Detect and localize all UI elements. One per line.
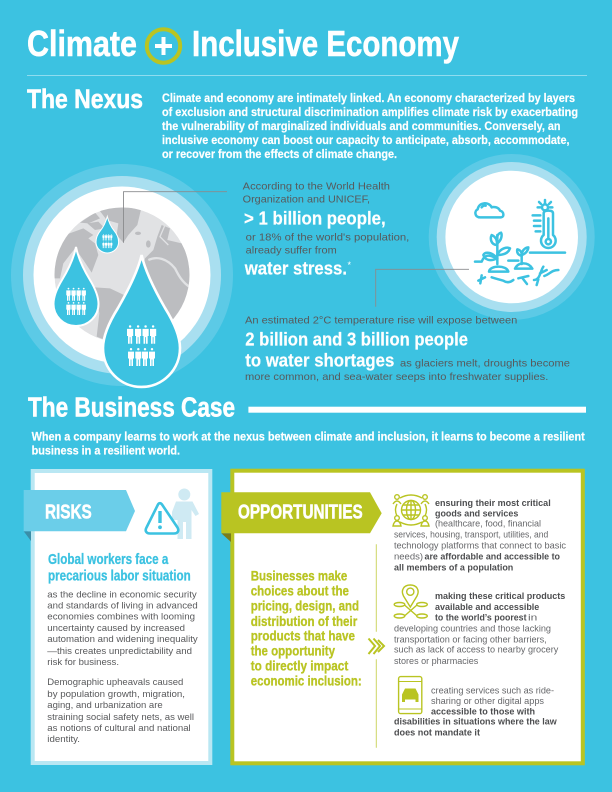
text: availability: such as lack of access to nearby grocery <box>394 644 559 655</box>
text: water shortages statistic: as glaciers melt, droughts become <box>400 358 570 370</box>
globe <box>52 207 193 342</box>
opportunities ribbon: OPPORTUNITIES <box>238 501 363 523</box>
text: water stress statistic <box>243 180 409 279</box>
text: affordability <box>394 497 566 573</box>
text: water shortages statistic: to water shortages <box>245 350 394 371</box>
risks text: automation and widening inequality <box>47 634 198 644</box>
text: water shortages statistic: An estimated 2°C temperature rise will expose between <box>245 314 517 326</box>
risks text: economies combines with looming <box>47 612 195 622</box>
leader line: globe to first statistic <box>124 192 227 243</box>
intro text block <box>162 91 578 161</box>
text: water stress statistic: According to the World Health <box>243 180 390 192</box>
intro text block: of exclusion and structural discrimination amplifies climate risk by exacerbating <box>162 105 578 119</box>
text: availability <box>394 590 565 666</box>
text: water stress statistic: Organization and UNICEF, <box>243 194 370 206</box>
title: Climate <box>27 23 137 64</box>
opportunities lead text: Businesses make <box>251 568 347 584</box>
risks text: as the decline in economic security <box>47 589 197 599</box>
icon: globe with people <box>393 495 429 526</box>
panel: opportunities <box>221 471 583 763</box>
text: digital access: creating services such as ride- <box>431 684 554 695</box>
leader line: climate icon to second statistic <box>376 269 469 307</box>
text: digital access: sharing or other digital apps <box>431 695 544 706</box>
text: water shortages statistic: 2 billion and 3 billion people <box>245 329 468 350</box>
text: availability: stores or pharmacies <box>394 655 479 666</box>
text: digital access: does not mandate it <box>394 727 480 738</box>
intro text block: the vulnerability of marginalized individuals and communities. Conversely, an <box>162 119 560 133</box>
icon: large water drop <box>103 255 180 387</box>
text: affordability: technology platforms that connect to basic <box>394 540 566 551</box>
text: affordability: all members of a population <box>394 562 514 573</box>
icon: map pin with crossing roads <box>394 585 427 618</box>
opportunities lead text: choices about the <box>251 583 349 599</box>
intro text block: inclusive economy can boost our capacity to anticipate, absorb, accommodate, <box>162 133 570 147</box>
risks text: and standards of living in advanced <box>47 600 198 610</box>
text: availability: transportation or facing other barriers, <box>394 634 547 645</box>
climate icon circle <box>429 154 595 320</box>
icon: plus <box>147 29 180 63</box>
intro text block: Climate and economy are intimately linked. An economy characterized by layers <box>162 91 575 105</box>
risks heading: precarious labor situation <box>48 569 191 585</box>
risks text <box>47 589 198 744</box>
heading: The Business Case: The Business Case <box>28 392 235 423</box>
text: availability: making these critical products <box>435 590 565 601</box>
risks text: as notions of cultural and national <box>47 723 191 733</box>
text: affordability: (healthcare, food, financial <box>435 518 541 529</box>
risks text: —this creates unpredictability and <box>47 646 192 656</box>
opportunities lead text: economic inclusion: <box>251 673 362 689</box>
text: water shortages statistic: more common, and sea-water seeps into freshwater supplies. <box>245 371 548 383</box>
opportunities lead text: the opportunity <box>251 643 335 659</box>
opportunities lead text <box>251 568 362 689</box>
risks text: uncertainty caused by increased <box>47 623 185 633</box>
text: water stress statistic: * <box>348 260 352 270</box>
title: Inclusive Economy <box>192 23 459 64</box>
text: water stress statistic: > 1 billion people, <box>244 208 386 229</box>
icon: small water drop <box>96 216 119 253</box>
risks ribbon <box>24 490 135 541</box>
risks heading: Global workers face a <box>48 552 169 568</box>
opportunities lead text: pricing, design, and <box>251 598 359 614</box>
text: availability: available and accessible <box>435 601 539 612</box>
opportunities ribbon <box>221 492 382 542</box>
icon: cloud, thermometer and plants <box>475 200 565 285</box>
icon: chevrons <box>368 638 384 654</box>
text: affordability: are affordable and accessible to <box>424 551 560 562</box>
risks ribbon: RISKS <box>45 501 92 523</box>
icon: person behind warning triangle <box>146 488 199 539</box>
text: digital access <box>394 684 557 738</box>
risks text: identity. <box>47 734 80 744</box>
title <box>27 23 459 64</box>
text: water stress statistic: already suffer from <box>246 245 337 257</box>
icon: phone with car <box>399 677 422 714</box>
text: water stress statistic: water stress. <box>244 258 347 279</box>
risks heading <box>48 552 191 585</box>
intro text block: or recover from the effects of climate change. <box>162 147 397 161</box>
text: affordability: goods and services <box>435 508 518 519</box>
text: water shortages statistic <box>245 314 570 383</box>
text: availability: in <box>528 612 537 623</box>
business case intro <box>32 430 585 457</box>
risks text: aging, and urbanization are <box>47 700 163 710</box>
text: affordability: needs) <box>394 551 423 562</box>
text: availability: developing countries and those lacking <box>394 622 551 633</box>
risks text: Demographic upheavals caused <box>47 677 183 687</box>
business case intro: business in a resilient world. <box>32 443 180 457</box>
text: digital access: disabilities in situations where the law <box>394 716 557 727</box>
risks text: by population growth, migration, <box>47 689 185 699</box>
risks text: risk for business. <box>47 657 119 667</box>
text: affordability: services, housing, transport, utilities, and <box>394 529 548 540</box>
globe rings <box>11 164 233 386</box>
text: digital access: accessible to those with <box>431 706 535 717</box>
heading: The Nexus: The Nexus <box>27 84 143 114</box>
risks text: straining social safety nets, as well <box>47 712 194 722</box>
text: affordability: ensuring their most critical <box>435 497 551 508</box>
opportunities lead text: products that have <box>251 628 355 644</box>
panel: risks <box>24 471 210 763</box>
opportunities lead text: distribution of their <box>251 613 358 629</box>
text: availability: to the world’s poorest <box>435 612 526 623</box>
text: water stress statistic: or 18% of the world's population, <box>246 232 409 244</box>
opportunities lead text: to directly impact <box>251 658 349 674</box>
icon: medium water drop <box>54 247 98 326</box>
